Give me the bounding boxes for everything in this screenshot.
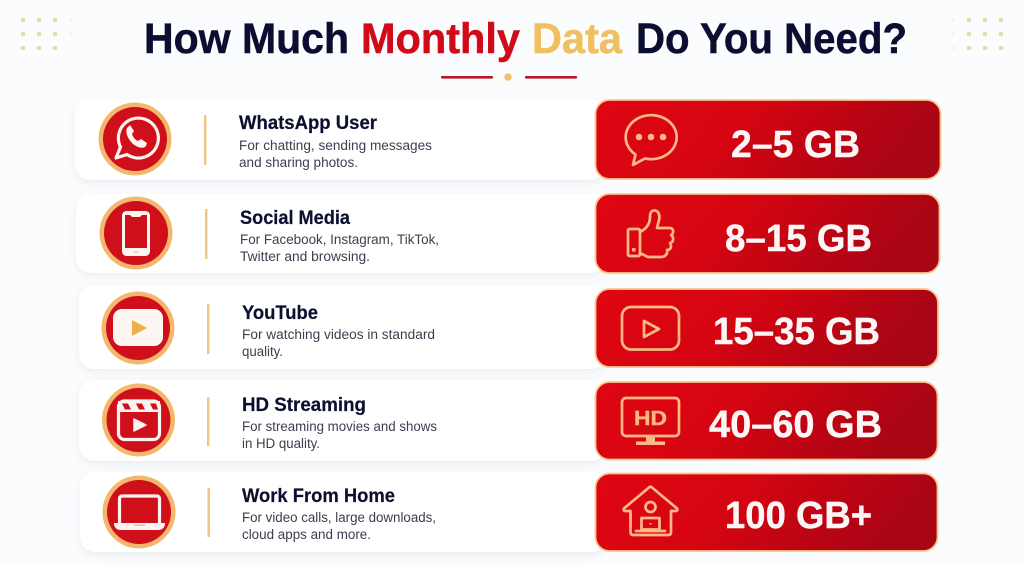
title: Do You Need? — [636, 15, 907, 63]
pill: 8–15 GB — [596, 194, 940, 273]
description: quality. — [242, 344, 283, 359]
title: Monthly — [361, 15, 520, 63]
icon: thumbs up — [628, 210, 673, 257]
decorative dots: top left — [21, 18, 73, 50]
heading: Work From Home — [242, 486, 395, 507]
icon: HD monitor: HD — [634, 408, 667, 430]
description: in HD quality. — [242, 436, 320, 451]
card background — [75, 99, 605, 180]
icon: play button — [622, 307, 679, 350]
description: For watching videos in standard — [242, 327, 435, 342]
card background — [76, 193, 606, 273]
icon: house with laptop — [624, 487, 677, 535]
panel: Work From Home — [80, 472, 607, 552]
icon: chat bubble — [626, 115, 677, 165]
value: 40–60 GB — [709, 404, 882, 446]
description: For streaming movies and shows — [242, 419, 437, 434]
description: cloud apps and more. — [242, 527, 371, 542]
description: For Facebook, Instagram, TikTok, — [240, 232, 439, 247]
title — [144, 15, 907, 63]
description — [242, 327, 435, 359]
value: 2–5 GB — [731, 124, 860, 166]
icon: film reel — [102, 384, 175, 456]
description: Twitter and browsing. — [240, 249, 370, 264]
panel: Social Media — [76, 193, 606, 273]
heading: YouTube — [242, 303, 318, 324]
description: and sharing photos. — [239, 155, 358, 170]
title: How Much — [144, 15, 349, 63]
decorative dots: top right — [951, 18, 1003, 50]
card background — [79, 380, 607, 461]
title underline ornament — [441, 73, 577, 81]
icon: HD monitor — [622, 398, 679, 445]
icon: WhatsApp — [98, 102, 172, 176]
pill: 100 GB+ — [596, 474, 938, 551]
pill: 40–60 GB — [596, 382, 938, 460]
description — [239, 138, 432, 170]
panel: YouTube — [79, 285, 607, 369]
value: 15–35 GB — [713, 311, 880, 353]
title: Data — [532, 15, 623, 63]
icon: video player — [102, 292, 174, 364]
value: 8–15 GB — [725, 218, 872, 260]
description — [240, 232, 439, 264]
icon: smartphone — [100, 196, 172, 270]
value: 100 GB+ — [725, 495, 872, 537]
pill: 2–5 GB — [596, 100, 940, 179]
description: For video calls, large downloads, — [242, 510, 436, 525]
description: For chatting, sending messages — [239, 138, 432, 153]
panel: HD Streaming — [79, 380, 607, 461]
card background — [79, 285, 607, 369]
panel: WhatsApp User — [75, 99, 605, 180]
icon: laptop — [102, 476, 176, 548]
heading: Social Media — [240, 208, 350, 229]
description — [242, 419, 437, 451]
description — [242, 510, 436, 542]
heading: WhatsApp User — [239, 113, 378, 134]
heading: HD Streaming — [242, 395, 366, 416]
card background — [80, 472, 607, 552]
pill: 15–35 GB — [596, 289, 938, 367]
